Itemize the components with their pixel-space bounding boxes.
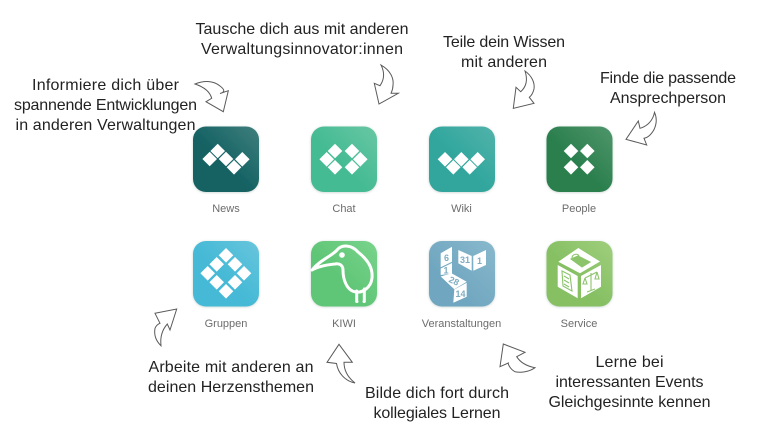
text: gruppen description: Arbeite mit anderen an [148,359,314,376]
app icon: Veranstaltungen: 1 [443,266,449,276]
text: news description [14,77,197,134]
text: gruppen description [148,359,314,396]
app icon: Chat [311,126,377,215]
text: kiwi description [365,385,509,422]
label: Chat: Chat [332,203,356,215]
label: News: News [212,203,240,215]
text: events description: Gleichgesinnte kennen [548,394,710,411]
app icon: Veranstaltungen: 31 [460,255,470,265]
text: gruppen description: deinen Herzensthemen [148,379,314,396]
text: people description [600,70,736,107]
text: wiki description: Teile dein Wissen [443,34,565,51]
app icon: Veranstaltungen: 6 [444,253,449,263]
text: news description: spannende Entwicklungen [14,97,197,114]
text: chat description [196,21,408,58]
app icon: Veranstaltungen: 1 [477,256,482,266]
label: Veranstaltungen: Veranstaltungen [422,318,501,330]
arrow: to wiki [513,71,534,108]
arrow: to veranstaltungen [500,344,535,372]
text: events description: Lerne bei [596,354,664,371]
label: Gruppen: Gruppen [205,318,247,330]
text: wiki description [443,34,565,71]
label: Service: Service [561,318,597,330]
label: KIWI: KIWI [332,318,356,330]
app icon: Veranstaltungen: 28 [447,274,461,288]
arrow: to chat [374,65,398,104]
text: chat description: Verwaltungsinnovator:innen [201,41,403,58]
text: kiwi description: kollegiales Lernen [374,405,500,422]
text: news description: in anderen Verwaltungen [16,117,196,134]
text: events description: interessanten Events [556,374,704,391]
app icon: KIWI [311,241,377,330]
text: wiki description: mit anderen [461,54,547,71]
arrow: to news [195,82,228,112]
label: People: People [562,203,596,215]
app icon: News [193,126,259,215]
app icon: Service [546,241,612,330]
text: events description [548,354,710,411]
label: Wiki: Wiki [451,203,472,215]
arrow: to people [626,112,656,145]
app icon: Veranstaltungen: 14 [455,289,466,299]
text: kiwi description: Bilde dich fort durch [365,385,509,402]
arrow: to gruppen [155,309,177,346]
app icon: Veranstaltungen [422,241,501,330]
text: chat description: Tausche dich aus mit anderen [196,21,408,38]
text: people description: Finde die passende [600,70,736,87]
app icon: Gruppen [193,241,259,330]
app icon: Wiki [429,126,495,215]
arrow: to kiwi [327,344,355,383]
app icon: People [546,126,612,215]
text: news description: Informiere dich über [32,77,180,94]
text: people description: Ansprechperson [610,90,726,107]
